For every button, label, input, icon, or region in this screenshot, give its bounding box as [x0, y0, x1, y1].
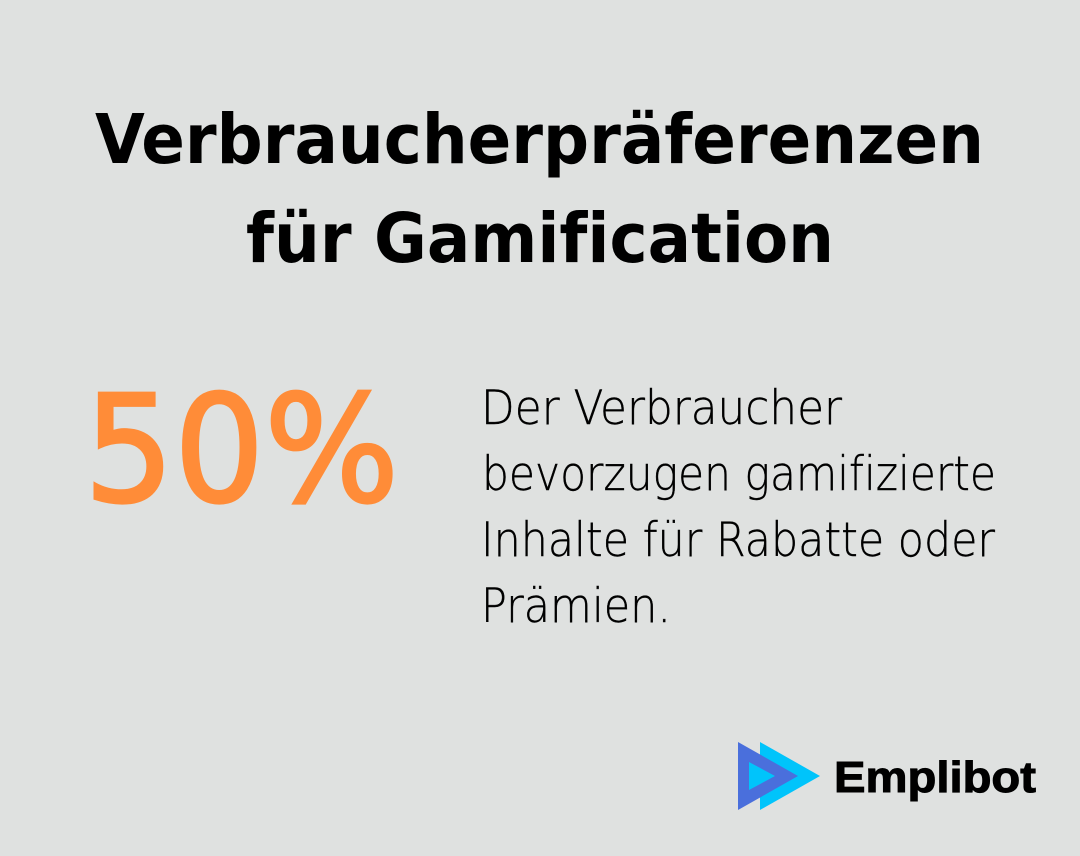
big number: 50%: 50% [84, 364, 399, 536]
description text: Prämien. [481, 579, 671, 634]
title: Verbraucherpräferenzen [95, 100, 984, 180]
description text [481, 381, 996, 634]
logo wordmark: Emplibot [834, 753, 1036, 802]
title: für Gamification [246, 199, 834, 279]
logo: Emplibot [738, 742, 1036, 810]
description text: bevorzugen gamifizierte [482, 447, 996, 502]
title [95, 100, 984, 279]
description text: Der Verbraucher [481, 381, 843, 436]
icon: play triangles [738, 742, 820, 810]
description text: Inhalte für Rabatte oder [481, 513, 996, 568]
